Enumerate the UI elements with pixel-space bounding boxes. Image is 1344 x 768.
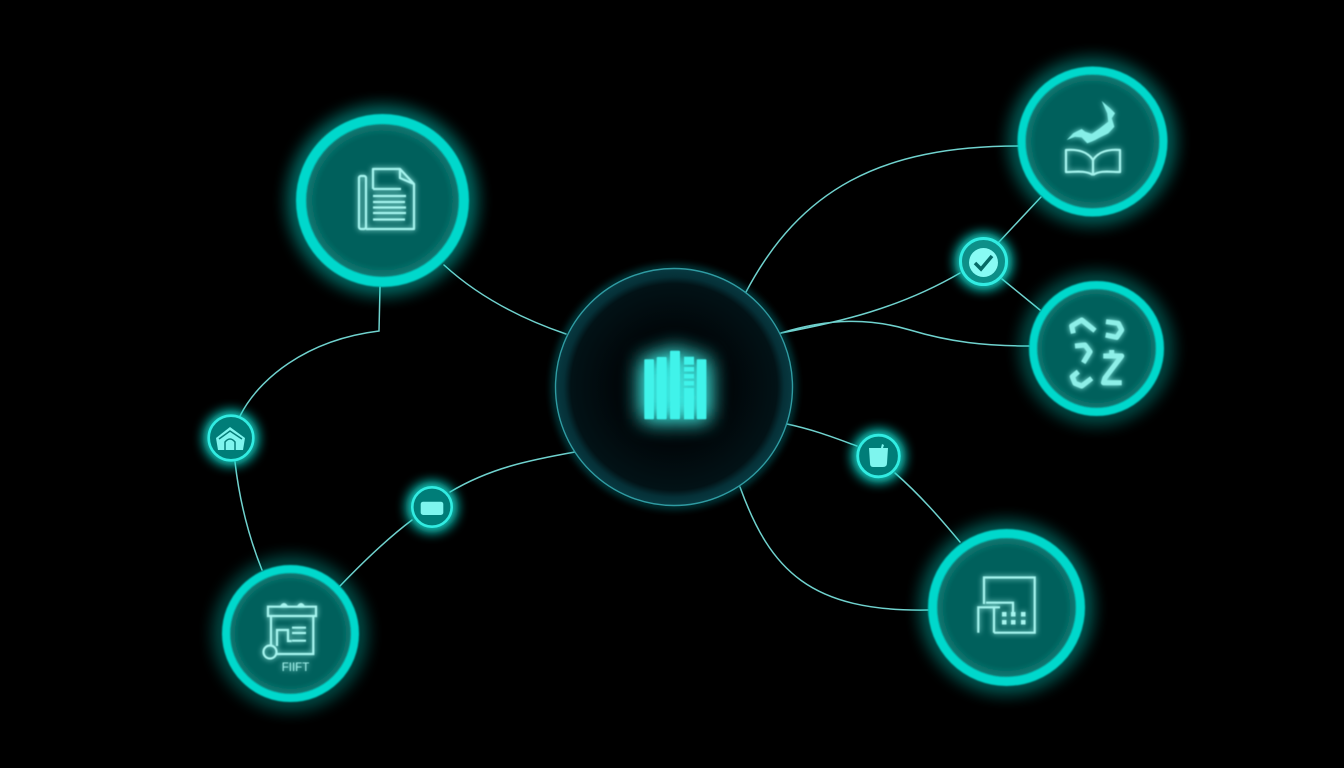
icon: arrows <box>1072 320 1122 386</box>
central hub <box>555 268 793 506</box>
icon: book bars <box>644 351 706 419</box>
node: small house <box>207 414 255 462</box>
icon: calculator <box>978 578 1035 633</box>
icon: book and bat <box>1066 101 1120 175</box>
icon: cup <box>869 444 888 467</box>
icon: house <box>216 427 245 450</box>
node: open book with bat <box>1020 68 1166 214</box>
node: small check <box>958 236 1008 286</box>
connector lines <box>235 146 1041 610</box>
node: small cup <box>856 433 902 479</box>
icon: document <box>359 169 414 229</box>
node: recycling arrows <box>1030 282 1162 414</box>
icon: card <box>421 502 443 515</box>
node: small card <box>410 485 454 529</box>
icon: check badge <box>969 248 998 277</box>
node: calculator building <box>930 532 1082 684</box>
node: calendar box <box>224 567 357 700</box>
node: document <box>298 116 466 284</box>
icon: box with label: FIIFT <box>282 662 309 674</box>
